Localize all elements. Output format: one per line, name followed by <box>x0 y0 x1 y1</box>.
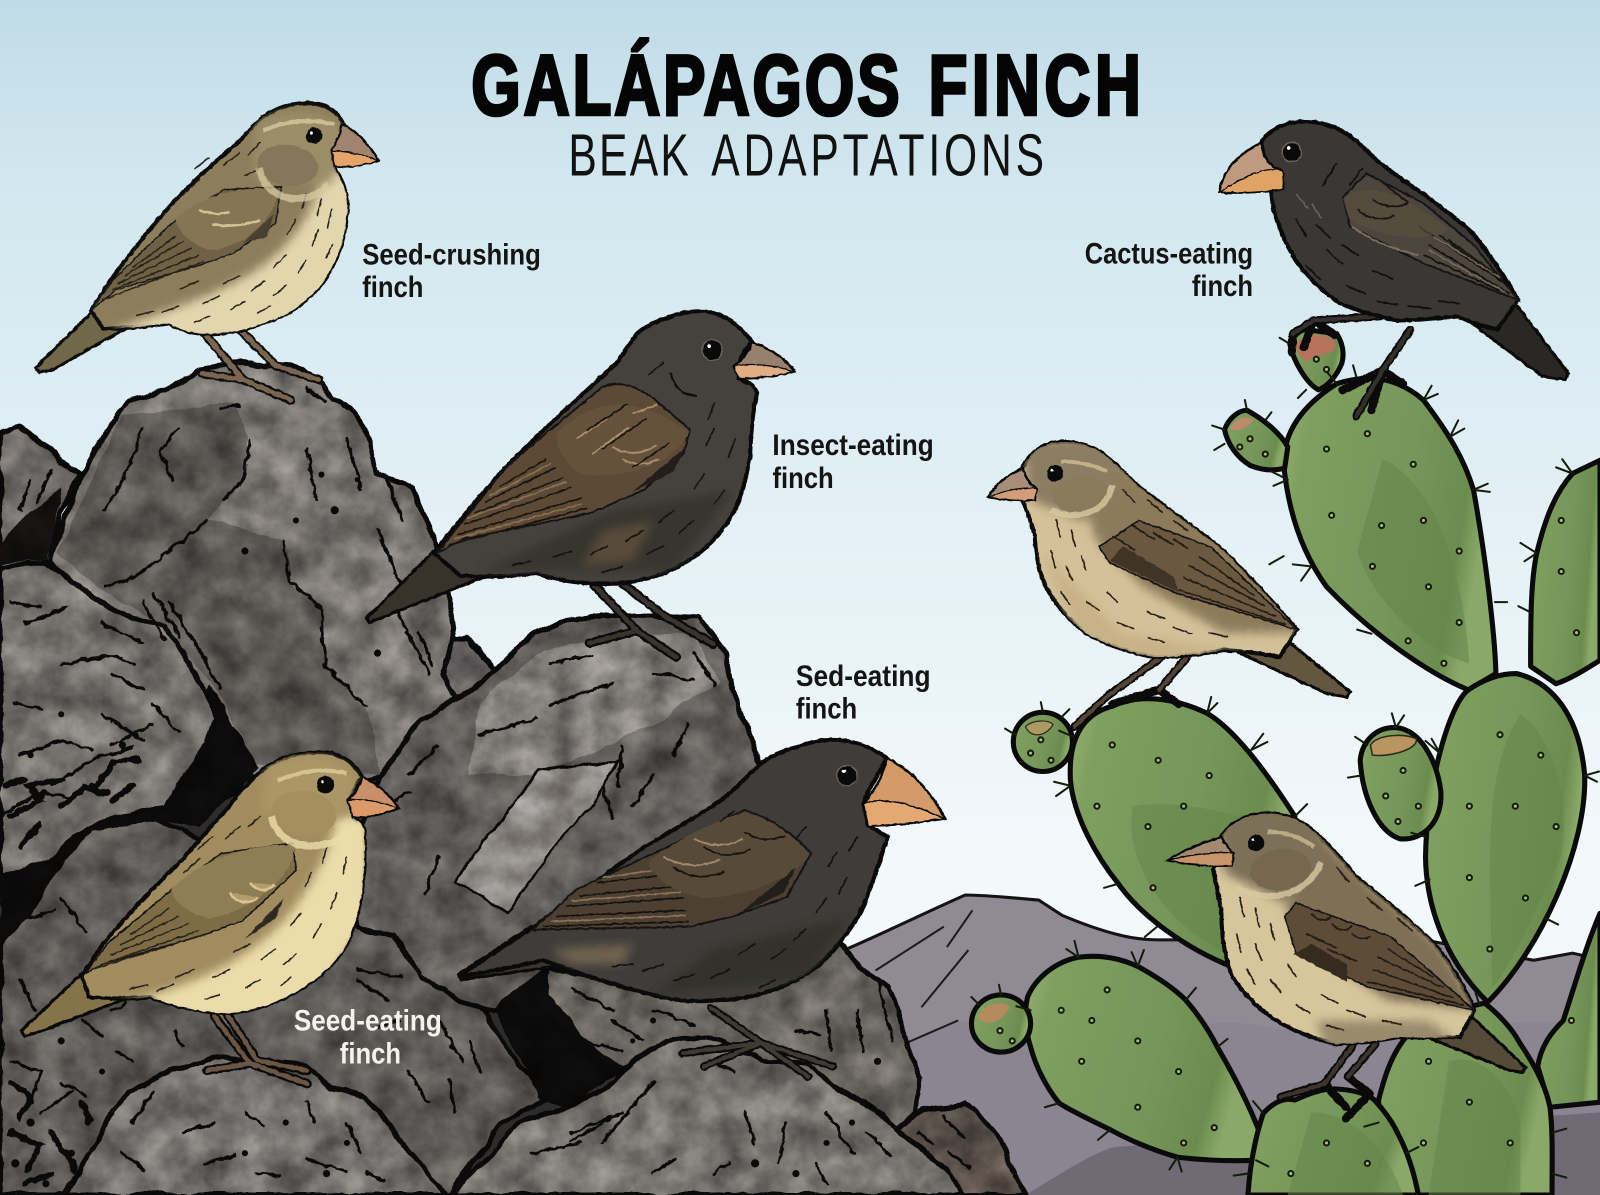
brow <box>278 770 347 781</box>
distant mountains <box>842 895 1600 1195</box>
collar <box>1237 862 1321 896</box>
legs <box>207 1013 307 1084</box>
label: seed-eating finch, lower: Seed-eating <box>294 1005 442 1038</box>
label: seed-eating finch, lower: finch <box>340 1037 401 1070</box>
finch: seed-eating, golden <box>21 752 399 1084</box>
cactus pad: centre left <box>1070 699 1295 965</box>
primary feather stripes <box>1418 227 1510 294</box>
soft back and flank shading <box>1020 439 1306 663</box>
rock: middle rock <box>347 615 761 1010</box>
label: insect-eating finch: Insect-eating <box>772 429 934 462</box>
collar <box>259 168 329 199</box>
cactus bud: reddish top <box>1290 330 1343 390</box>
collar <box>1051 485 1112 515</box>
rock: middle rock light block <box>454 759 619 913</box>
cactus shading <box>1131 459 1564 1195</box>
wing <box>1343 173 1518 300</box>
wing coverts <box>648 812 809 898</box>
label: seed-eating finch, upper: Sed-eating <box>796 660 931 693</box>
rock: dark face on upper rock <box>57 403 381 774</box>
rock: large upper rock <box>50 363 457 816</box>
legs <box>1074 657 1187 727</box>
cheek patch <box>1052 474 1111 516</box>
cheek patch <box>255 141 321 190</box>
eye <box>317 776 334 793</box>
rock: middle rock lit top <box>469 633 720 776</box>
body <box>82 752 365 1013</box>
brow <box>1267 832 1314 847</box>
rock: far left <box>0 429 80 568</box>
finch: large-beaked, dark <box>458 740 945 1077</box>
cactus pad: front bottom <box>1248 1089 1418 1195</box>
body streaks <box>1237 867 1412 1030</box>
cactus pad: lower left <box>1025 956 1260 1161</box>
rock backing <box>0 577 959 1195</box>
finch: bottom right, grey-tan <box>1167 806 1526 1118</box>
subtitle <box>568 122 1044 188</box>
rock hollow: far left <box>0 488 61 564</box>
body <box>434 311 757 584</box>
soft body shading <box>551 918 847 995</box>
beak <box>734 342 795 379</box>
tail <box>36 302 133 372</box>
subtitle: ADAPTATIONS <box>711 122 1044 188</box>
body streaks <box>512 362 735 572</box>
primary feather stripes <box>1179 556 1286 625</box>
legs <box>590 582 713 657</box>
eye <box>1248 835 1264 851</box>
soft belly shading <box>112 112 357 342</box>
wing <box>533 810 811 930</box>
cactus pad: far right <box>1531 460 1600 684</box>
eye <box>306 128 322 144</box>
title: GALÁPAGOS <box>471 37 900 132</box>
primary feather stripes <box>1367 949 1464 1005</box>
wing <box>86 843 296 974</box>
rock: bottom left <box>64 1058 446 1195</box>
wing <box>91 187 282 310</box>
label: insect-eating finch: finch <box>772 462 834 495</box>
rock: lower left mass <box>0 820 546 1195</box>
body <box>1022 442 1297 657</box>
eye <box>1282 142 1302 162</box>
rock: under large beak finch <box>540 944 920 1129</box>
finch: middle right, tan <box>988 439 1350 727</box>
eye <box>702 340 722 360</box>
beak <box>1167 837 1234 866</box>
wing coverts <box>556 405 689 475</box>
legs <box>1292 316 1410 416</box>
wing <box>1099 520 1297 630</box>
cactus bud highlights <box>978 335 1416 1023</box>
label: seed-crushing finch: finch <box>362 271 423 304</box>
cactus bud: centre pad <box>1013 712 1072 771</box>
label: cactus-eating finch: Cactus-eating <box>1085 237 1253 270</box>
soft belly shading <box>117 755 369 1020</box>
legs <box>683 1008 833 1077</box>
rock: left rock <box>0 561 216 878</box>
title <box>471 37 1141 132</box>
tail <box>21 964 128 1036</box>
rock: brown corner rock <box>897 1103 1026 1195</box>
rock: small back rock <box>439 637 494 704</box>
finch: seed-crushing, tan <box>36 103 379 400</box>
primary feather stripes <box>102 237 204 300</box>
body <box>1213 813 1474 1044</box>
cheek patch <box>269 787 340 840</box>
title: FINCH <box>929 37 1141 132</box>
cactus pad: bottom right edge <box>1538 913 1600 1107</box>
cactus pad: lower middle <box>1379 1003 1552 1195</box>
cactus areoles <box>997 357 1579 1176</box>
tail <box>1240 623 1350 697</box>
soft back and flank shading <box>1214 806 1480 1051</box>
body streaks <box>612 811 857 988</box>
wing coverts <box>176 188 278 250</box>
legs <box>202 327 318 400</box>
tail <box>1469 286 1568 380</box>
primary feather stripes <box>449 459 587 545</box>
tail <box>366 546 485 623</box>
body streaks <box>130 816 347 999</box>
cactus bud: lower pad <box>971 995 1031 1052</box>
rock cave under large beak finch <box>494 966 626 1103</box>
primary feather stripes <box>543 874 689 927</box>
cactus cluster <box>971 330 1600 1195</box>
finch: cactus-eating, dark <box>1219 121 1568 416</box>
soft body shading <box>480 490 735 571</box>
body <box>458 740 888 1001</box>
body streaks <box>1296 163 1459 308</box>
eye <box>837 765 857 786</box>
rock pile <box>0 363 1026 1195</box>
rock: bottom centre <box>451 1037 964 1195</box>
tail <box>1423 995 1526 1073</box>
cactus bud: beside tall pad <box>1360 728 1441 839</box>
beak <box>332 125 379 167</box>
legs <box>1281 1044 1376 1118</box>
beak <box>1219 143 1284 193</box>
cactus bud: left of top pad <box>1224 410 1288 470</box>
beak <box>988 468 1037 500</box>
body <box>1261 121 1518 330</box>
body streaks <box>137 143 333 322</box>
body <box>91 103 347 334</box>
finch: insect-eating, dark <box>366 311 795 657</box>
wing coverts <box>1343 190 1449 237</box>
cheek arc <box>670 372 697 396</box>
cactus pad: large top <box>1284 378 1496 690</box>
label: seed-eating finch, upper: finch <box>796 692 857 725</box>
tail <box>458 927 571 980</box>
eye <box>1047 465 1063 482</box>
label: seed-crushing finch: Seed-crushing <box>362 238 541 271</box>
subtitle: BEAK <box>568 122 689 188</box>
wing <box>437 384 690 553</box>
black shadow band <box>0 686 260 944</box>
beak <box>863 758 945 826</box>
wing <box>1285 903 1474 1010</box>
rock cracks and speckles <box>0 388 969 1184</box>
rock pits <box>11 471 881 1187</box>
cactus spines <box>971 338 1599 1178</box>
body streaks <box>1051 490 1228 642</box>
beak <box>348 777 399 817</box>
wing coverts <box>171 845 294 918</box>
brow <box>263 121 335 131</box>
cheek patch <box>1247 845 1314 894</box>
brow <box>1061 461 1107 471</box>
label: cactus-eating finch: finch <box>1192 270 1253 303</box>
cactus pad: tall centre <box>1426 674 1585 1002</box>
collar <box>271 816 347 846</box>
